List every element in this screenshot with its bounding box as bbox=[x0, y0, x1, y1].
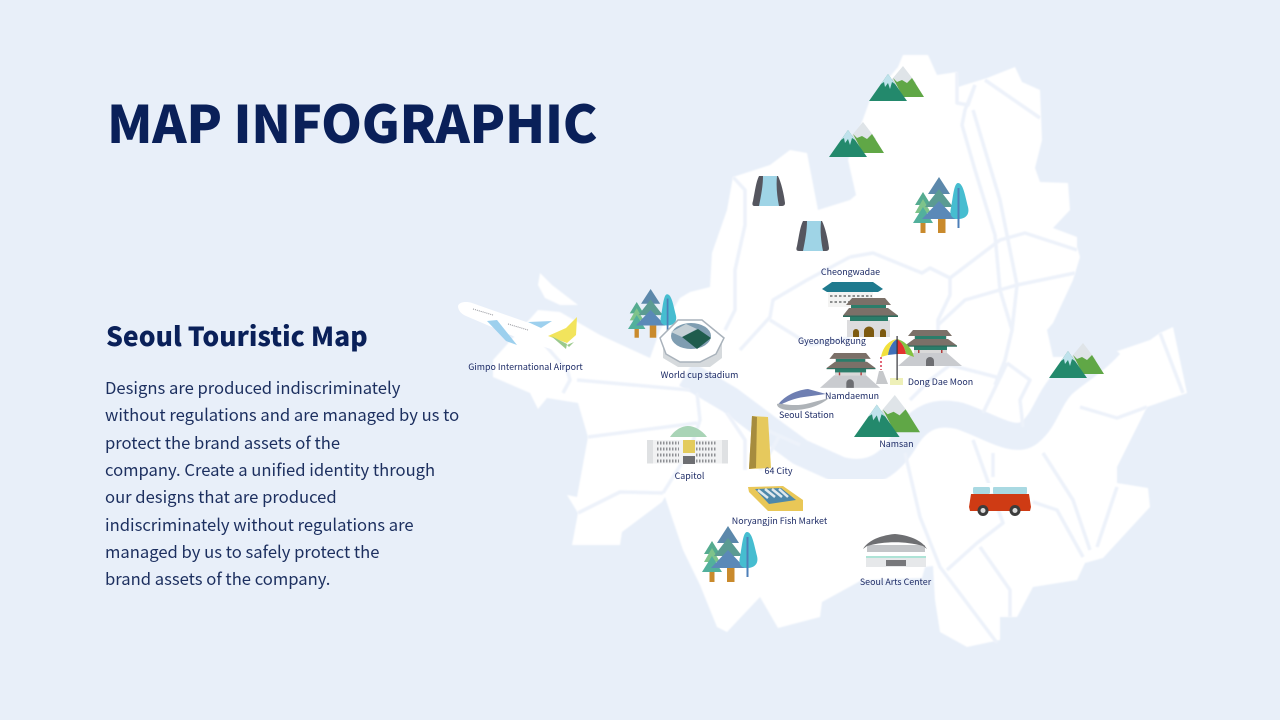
icon: Namsan mountain bbox=[854, 395, 920, 437]
river bbox=[686, 345, 1110, 472]
icon: Dong Dae Moon gate bbox=[898, 330, 962, 366]
icon: Seoul Station bbox=[777, 389, 829, 410]
icon: trees north-east bbox=[913, 177, 968, 233]
icon: trees west bbox=[628, 289, 676, 338]
icon: mountain north 2 bbox=[829, 122, 884, 157]
label: Seoul Station: Seoul Station bbox=[779, 408, 834, 421]
label: 64 City: 64 City bbox=[765, 464, 793, 477]
label: Gimpo International Airport: Gimpo International Airport bbox=[468, 360, 583, 373]
icon: mountain north 1 bbox=[869, 66, 924, 101]
icon: Cheongwadae bbox=[822, 282, 883, 307]
icon: fish market bbox=[748, 486, 803, 511]
label: Namdaemun: Namdaemun bbox=[825, 389, 879, 402]
label: Namsan: Namsan bbox=[879, 437, 914, 450]
text block: description: Designs are produced indiscriminately bbox=[105, 375, 400, 399]
icon: Capitol bbox=[647, 426, 728, 464]
icon: waterfall 2 bbox=[796, 221, 829, 251]
text block: description: our designs that are produced bbox=[105, 484, 337, 508]
text block: description: company. Create a unified identity through bbox=[105, 457, 435, 481]
text block: description: managed by us to safely protect the bbox=[105, 539, 379, 563]
label: Gyeongbokgung: Gyeongbokgung bbox=[798, 334, 866, 347]
icon: 64 City tower bbox=[749, 416, 771, 469]
icon: Seoul Arts Center bbox=[863, 534, 927, 567]
roads bbox=[545, 72, 1183, 643]
text block: description: protect the brand assets of the bbox=[105, 430, 340, 454]
label: Cheongwadae: Cheongwadae bbox=[821, 265, 880, 278]
icon: trees south bbox=[702, 526, 757, 582]
text block: description: indiscriminately without regulations are bbox=[105, 512, 414, 536]
heading: Seoul Touristic Map: Seoul Touristic Map bbox=[106, 315, 368, 354]
icon: pagoda bbox=[876, 357, 888, 384]
icon: Gyeongbokgung gate bbox=[843, 298, 898, 337]
text block: description bbox=[105, 375, 459, 590]
icon: mountain east bbox=[1049, 343, 1104, 378]
icon: umbrella bbox=[881, 336, 914, 385]
icon: Namdaemun gate bbox=[820, 353, 880, 388]
label: Noryangjin Fish Market: Noryangjin Fish Market bbox=[732, 514, 828, 527]
icon: World cup stadium bbox=[660, 320, 724, 367]
icon: airplane bbox=[458, 302, 577, 352]
text block: description: without regulations and are managed by us to bbox=[105, 402, 459, 426]
icon: bus bbox=[969, 483, 1031, 516]
icon: waterfall 1 bbox=[752, 176, 785, 206]
landmass bbox=[493, 55, 1187, 647]
label: Dong Dae Moon: Dong Dae Moon bbox=[908, 375, 973, 388]
label: Capitol: Capitol bbox=[675, 469, 705, 482]
text block: description: brand assets of the company. bbox=[105, 566, 330, 590]
label: World cup stadium: World cup stadium bbox=[661, 368, 738, 381]
title: MAP INFOGRAPHIC bbox=[107, 83, 597, 158]
label: Seoul Arts Center: Seoul Arts Center bbox=[860, 575, 932, 588]
